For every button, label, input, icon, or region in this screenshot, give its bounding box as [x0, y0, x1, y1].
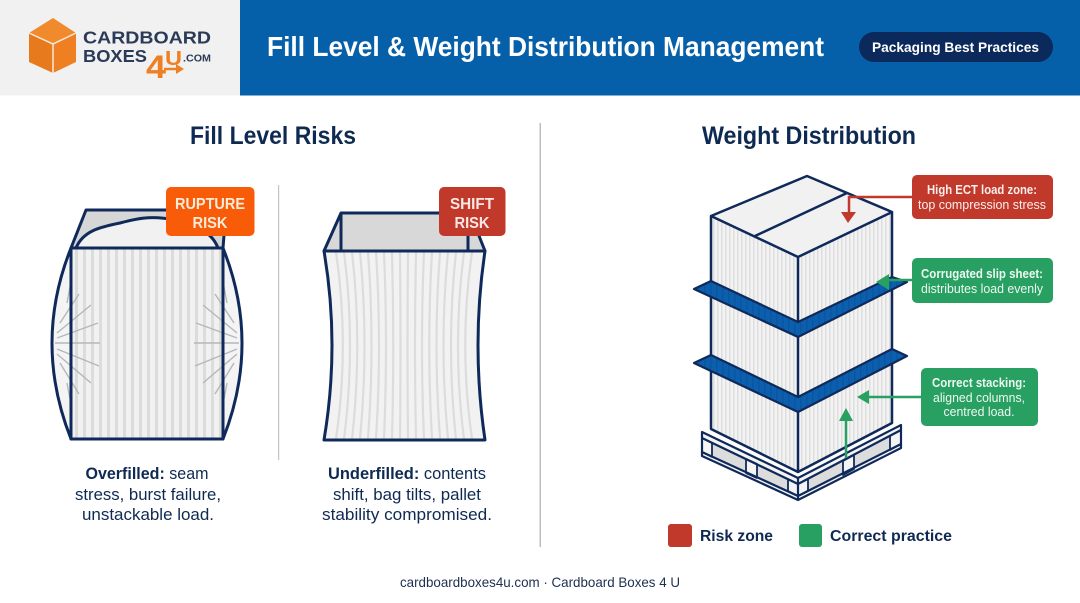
- stacked boxes: [711, 176, 892, 472]
- caption: underfilled: Underfilled: contents: [328, 464, 486, 483]
- badge: rupture risk: RUPTURE: [175, 196, 245, 213]
- slip sheet: lower: [694, 349, 907, 412]
- arrow: upward load: [839, 408, 853, 458]
- arrow: correct stacking: [857, 390, 921, 404]
- logo: BOXES: [83, 46, 147, 66]
- logo: U: [165, 48, 182, 70]
- callout: correct stacking: aligned columns,: [933, 390, 1025, 405]
- slip sheet: upper: [694, 277, 907, 337]
- box top: [711, 176, 892, 257]
- caption: overfilled: [75, 464, 221, 524]
- caption: underfilled: shift, bag tilts, pallet: [333, 485, 481, 504]
- logo: .COM: [183, 52, 211, 64]
- logo: 4: [146, 49, 166, 85]
- badge: rupture risk: [166, 187, 254, 236]
- callout: high ECT load zone: top compression stress: [918, 197, 1046, 212]
- stress rays right: [194, 287, 239, 399]
- arrow: slip sheet: [876, 274, 912, 290]
- legend: Risk zone: [700, 528, 773, 545]
- logo: [29, 18, 211, 85]
- pallet blocks: [702, 430, 901, 496]
- callout: high ECT load zone: [912, 175, 1053, 219]
- heading: fill level risks: Fill Level Risks: [190, 122, 356, 150]
- logo: CARDBOARD: [83, 28, 211, 48]
- callout: correct stacking: [921, 368, 1038, 426]
- badge: shift risk: [439, 187, 506, 236]
- badge: shift risk: SHIFT: [450, 196, 494, 213]
- caption: overfilled: Overfilled: seam: [86, 464, 209, 483]
- caption: underfilled: stability compromised.: [322, 505, 492, 524]
- heading: weight distribution: Weight Distribution: [702, 122, 916, 150]
- footer: cardboardboxes4u.com · Cardboard Boxes 4 U: [400, 574, 680, 590]
- arrow: load zone: [841, 197, 912, 223]
- legend: [668, 524, 952, 547]
- callout: corrugated slip sheet: [912, 258, 1053, 303]
- badge: rupture risk: RISK: [192, 215, 228, 232]
- callout: correct stacking: centred load.: [944, 404, 1014, 419]
- underfilled bag: [324, 213, 485, 440]
- badge: packaging best practices: Packaging Best Practices: [872, 39, 1039, 55]
- fabric stripes: [336, 252, 472, 439]
- callout: corrugated slip sheet: distributes load evenly: [921, 281, 1043, 296]
- overfilled bag: [52, 210, 242, 439]
- stress rays left: [55, 287, 100, 399]
- badge: shift risk: RISK: [454, 215, 490, 232]
- callout: high ECT load zone: High ECT load zone:: [927, 182, 1037, 197]
- title: Fill Level & Weight Distribution Management: [267, 31, 824, 62]
- header: [0, 0, 1080, 96]
- pallet: [702, 425, 901, 500]
- caption: overfilled: unstackable load.: [82, 505, 214, 524]
- callout: correct stacking: Correct stacking:: [932, 375, 1026, 390]
- caption: underfilled: [322, 464, 492, 524]
- badge: packaging best practices: [859, 32, 1053, 62]
- legend: Correct practice: [830, 528, 952, 545]
- caption: overfilled: stress, burst failure,: [75, 485, 221, 504]
- callout: corrugated slip sheet: Corrugated slip sheet:: [921, 266, 1043, 281]
